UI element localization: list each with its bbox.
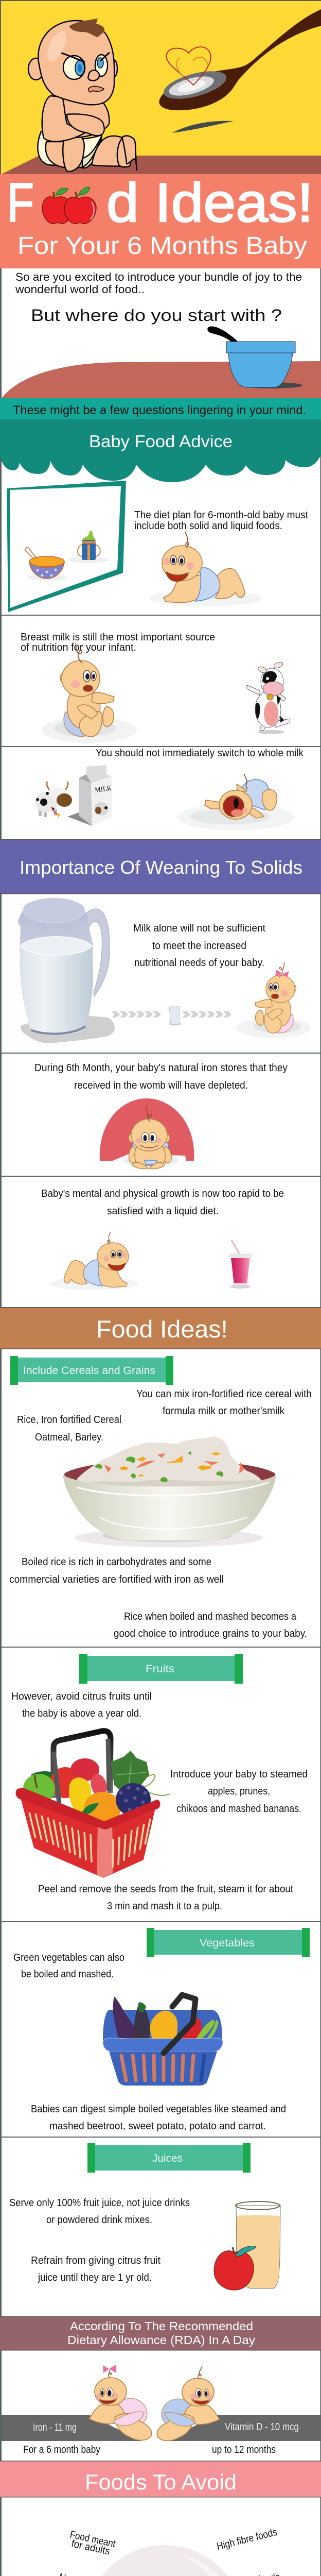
panel: iron stores [34, 1062, 288, 1171]
banner: fruits [79, 1654, 243, 1684]
title banner [0, 172, 321, 268]
iron text line 2: received in the womb will have depleted. [74, 1080, 248, 1091]
question strip text: These might be a few questions lingering in your mind. [13, 403, 306, 417]
milk text line 3: nutritional needs of your baby. [134, 957, 264, 969]
cereal text: You can mix iron-fortified rice cereal with [136, 1388, 312, 1400]
breast milk text: Breast milk is still the most important source [21, 632, 215, 643]
title letter F: F [7, 172, 34, 233]
citrus juice text: Refrain from giving citrus fruit [31, 2255, 160, 2266]
panel: vegetables [13, 1928, 310, 2132]
icon: juice glass and apple [214, 2201, 280, 2290]
label: High fibre foods [216, 2527, 278, 2552]
panel: foods to avoid [30, 2527, 298, 2576]
juice text line 2: or powdered drink mixes. [46, 2214, 152, 2226]
icon: crying baby [177, 774, 294, 831]
heading: Foods To Avoid [85, 2470, 237, 2494]
heading: Food Ideas! [96, 1315, 228, 1343]
milk text: Milk alone will not be sufficient [133, 923, 265, 934]
iron value: Iron - 11 mg [33, 2422, 77, 2433]
icon: spoon shadow [172, 121, 234, 133]
teal frame [7, 481, 126, 612]
iron text: During 6th Month, your baby's natural iron stores that they [34, 1062, 288, 1074]
banner: juices [87, 2143, 251, 2173]
icon: baby girl crawling [89, 2365, 152, 2440]
icon: bowl of food [26, 548, 66, 581]
label: for adults [70, 2538, 111, 2557]
section header: RDA [0, 2316, 321, 2350]
intro text: So are you excited to introduce your bundle of joy to the [15, 270, 302, 283]
peel text: Peel and remove the seeds from the fruit, steam it for about [38, 1884, 293, 1895]
juice text: Serve only 100% fruit juice, not juice drinks [9, 2197, 190, 2209]
icon: rice bowl [63, 1436, 276, 1547]
citrus text line 2: the baby is above a year old. [22, 1708, 141, 1719]
digest text: Babies can digest simple boiled vegetables like steamed and [31, 2104, 286, 2115]
growth text: Baby's mental and physical growth is now too rapid to be [41, 1188, 284, 1199]
icon: baby boy crawling [157, 2366, 220, 2441]
bubble [85, 2545, 244, 2576]
steamed text: Introduce your baby to steamed [170, 1769, 308, 1780]
panel: cereals and grains [9, 1356, 312, 1639]
icon: blue bowl [207, 326, 302, 388]
cereal text line 2: formula milk or mother'smilk [163, 1405, 285, 1417]
section header: food ideas [0, 1307, 321, 1349]
icon: toy cow [35, 782, 72, 818]
breast milk text line 2: of nutrition for your infant. [21, 642, 136, 653]
up to 12 months: up to 12 months [212, 2444, 276, 2455]
citrus juice text line 2: juice until they are 1 yr old. [38, 2272, 152, 2283]
label: Food meant [69, 2529, 117, 2550]
red dome [100, 1098, 194, 1161]
banner: include cereals and grains [10, 1356, 173, 1385]
icon: fruit basket [16, 1731, 170, 1878]
icon: small chevrons right [182, 1011, 231, 1018]
panel: RDA values [2, 2365, 321, 2455]
panel: juices [9, 2143, 280, 2290]
icon: crawling baby mirrored [50, 1232, 138, 1290]
panel: whole milk [35, 748, 304, 831]
icon: pink drink [229, 1240, 252, 1289]
heading line 1: According To The Recommended [70, 2319, 253, 2333]
diet text line 2: include both solid and liquid foods. [134, 520, 282, 532]
banner: vegetables [147, 1928, 310, 1957]
icon: front-facing baby [122, 1106, 179, 1169]
mashed rice text: Rice when boiled and mashed becomes a [124, 1611, 297, 1622]
section header: baby food advice [0, 419, 321, 482]
icon: sitting baby [41, 643, 137, 743]
rice text: Boiled rice is rich in carbohydrates and some [22, 1556, 211, 1568]
panel: growth [41, 1188, 284, 1290]
banner: juices: Juices [152, 2153, 183, 2164]
icon: crawling baby [149, 532, 262, 606]
grey ledge left [2, 2415, 141, 2441]
banner: include cereals and grains: Include Cereals and Grains [23, 1365, 155, 1377]
icon: dancing cow [247, 661, 290, 734]
banner: vegetables: Vegetables [200, 1937, 255, 1949]
rice text line 2: commercial varieties are fortified with iron as well [9, 1574, 224, 1585]
icon: spoon with steam [159, 9, 321, 110]
icon: small chevrons left [112, 1011, 161, 1018]
green vegetables text line 2: be boiled and mashed. [21, 1969, 114, 1980]
icon: baby girl [236, 962, 311, 1038]
section header: foods to avoid [0, 2461, 321, 2498]
mashed rice text line 2: good choice to introduce grains to your baby. [114, 1628, 307, 1639]
hero panel [0, 0, 321, 174]
vitamin D value: Vitamin D - 10 mcg [225, 2421, 299, 2433]
peel text line 2: 3 min and mash it to a pulp. [107, 1901, 222, 1912]
icon: sippy cup [68, 531, 108, 563]
panel: breast milk [21, 632, 290, 743]
intro text line 2: wonderful world of food.. [15, 283, 145, 296]
panel: fruits [11, 1654, 308, 1912]
subtitle: For Your 6 Months Baby [17, 232, 307, 260]
grey ledge right [165, 2415, 321, 2441]
floor patch [113, 1154, 186, 1171]
milk text line 2: to meet the increased [152, 940, 246, 952]
icon: glass of milk [169, 1006, 181, 1025]
table [2, 361, 321, 398]
grain list line 2: Oatmeal, Barley. [35, 1432, 103, 1443]
heading: Baby Food Advice [89, 432, 233, 451]
banner: fruits: Fruits [146, 1663, 174, 1675]
icon: milk carton [67, 765, 112, 826]
whole milk text: You should not immediately switch to whole milk [96, 748, 304, 759]
heading: Importance Of Weaning To Solids [20, 857, 302, 878]
panel: diet plan [7, 481, 308, 612]
icon: grumpy baby [28, 19, 137, 172]
citrus text: However, avoid citrus fruits until [11, 1691, 152, 1702]
grain list: Rice, Iron fortified Cereal [17, 1414, 121, 1426]
steamed text line 3: chikoos and mashed bananas. [176, 1803, 301, 1815]
digest text line 2: mashed beetroot, sweet potato, potato and carrot. [49, 2121, 266, 2132]
for a 6 month baby: For a 6 month baby [23, 2444, 100, 2455]
growth text line 2: satisfied with a liquid diet. [107, 1206, 219, 1217]
heading line 2: Dietary Allowance (RDA) In A Day [67, 2333, 256, 2347]
diet text: The diet plan for 6-month-old baby must [134, 510, 308, 521]
title letters d Ideas!: d Ideas! [106, 172, 313, 233]
panel: milk alone [18, 898, 311, 1043]
intro panel [2, 270, 321, 398]
question strip [0, 398, 321, 419]
icon: two apples [42, 187, 96, 224]
icon: vegetable basket [103, 1995, 223, 2086]
green vegetables text: Green vegetables can also [13, 1952, 124, 1963]
steamed text line 2: apples, prunes, [208, 1786, 270, 1797]
question heading: But where do you start with ? [31, 306, 282, 325]
icon: milk jug [18, 898, 115, 1043]
section header: importance of weaning [0, 839, 321, 894]
icon: milk carton: MILK [94, 785, 112, 794]
